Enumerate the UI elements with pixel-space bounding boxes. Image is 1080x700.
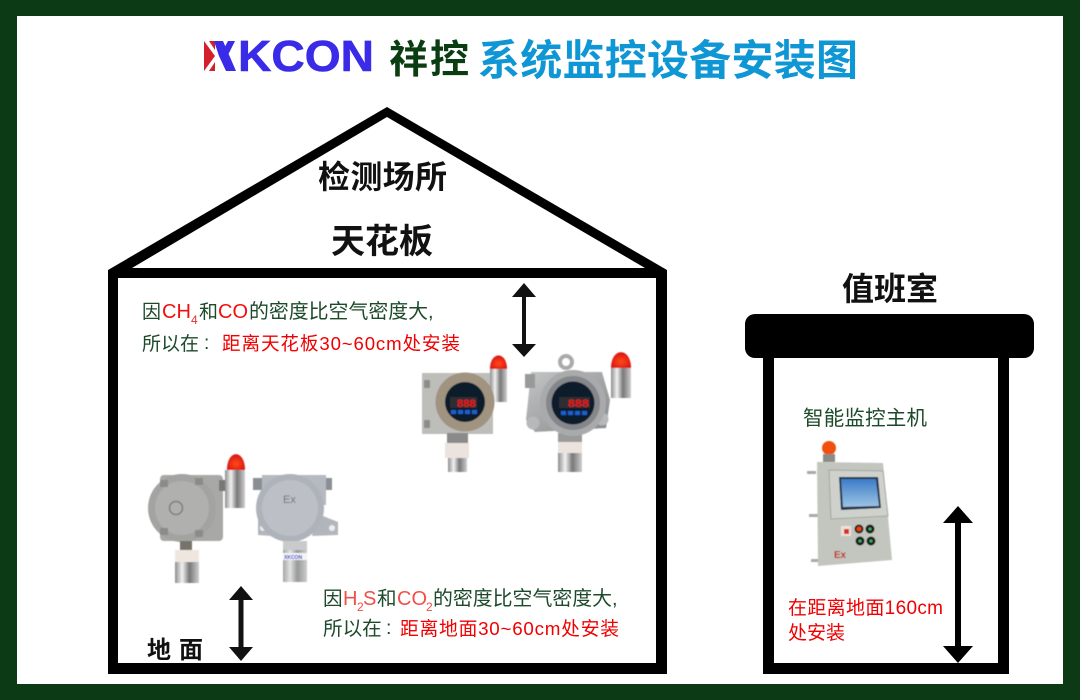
house outline: detection site — [108, 107, 667, 674]
text block: CH4 and CO note: : — [204, 333, 209, 354]
text block: H2S and CO2 note: CO — [397, 588, 427, 610]
device: lower left detector — [148, 454, 245, 583]
text block: CH4 and CO note — [142, 300, 460, 355]
heading: ceiling: 天花板 — [331, 223, 433, 261]
text block: CH4 and CO note: 所以在 — [142, 333, 199, 355]
text block: H2S and CO2 note: 的密度比空气密度大, — [433, 587, 618, 610]
text block: CH4 and CO note: 和 — [199, 301, 218, 323]
duty room roof — [745, 314, 1034, 358]
device: control panel — [807, 441, 892, 566]
text block: H2S and CO2 note: 所以在 — [323, 618, 382, 640]
text block: panel installation height — [788, 597, 943, 644]
device: lower right detector: Ex — [283, 494, 296, 506]
heading: ground: 地 面 — [147, 637, 203, 664]
device: upper left detector: 888 — [457, 398, 476, 410]
arrow: panel height — [943, 506, 973, 663]
text block: H2S and CO2 note: 距离地面30~60cm处安装 — [400, 618, 619, 639]
text block: panel installation height: 处安装 — [788, 622, 845, 644]
text block: H2S and CO2 note: 和 — [377, 588, 397, 610]
duty room outline — [763, 350, 1009, 674]
text block: H2S and CO2 note: 2 — [357, 600, 364, 614]
text block: H2S and CO2 note: : — [386, 617, 391, 639]
device: lower right detector: XKCON — [284, 555, 302, 561]
device: upper right detector: 888 — [568, 398, 589, 410]
label: monitoring host: 智能监控主机 — [803, 407, 928, 430]
title: brand name: 祥控 — [389, 39, 469, 82]
device: upper right detector — [525, 352, 631, 472]
arrow: distance to ceiling — [512, 283, 536, 357]
logo: XKCON: KCON — [238, 32, 374, 81]
arrow: distance to ground — [229, 586, 253, 661]
text block: CH4 and CO note: 距离天花板30~60cm处安装 — [222, 333, 460, 354]
text block: CH4 and CO note: CH — [162, 301, 191, 323]
title — [204, 32, 858, 84]
device: upper left detector — [422, 356, 507, 472]
text block: H2S and CO2 note — [323, 587, 619, 640]
device: lower right detector — [253, 474, 338, 582]
text block: panel installation height: 在距离地面160cm — [788, 597, 943, 619]
title: main heading: 系统监控设备安装图 — [478, 37, 858, 84]
device: control panel: Ex — [834, 550, 846, 561]
text block: H2S and CO2 note: S — [363, 588, 376, 610]
text block: H2S and CO2 note: 2 — [426, 600, 433, 614]
text block: CH4 and CO note: 4 — [191, 313, 198, 327]
heading: detection site: 检测场所 — [318, 159, 447, 195]
text block: H2S and CO2 note: 因 — [323, 588, 343, 610]
text block: CH4 and CO note: 因 — [142, 302, 161, 323]
text block: CH4 and CO note: 的密度比空气密度大, — [249, 300, 434, 323]
heading: duty room: 值班室 — [842, 271, 938, 307]
text block: CH4 and CO note: CO — [218, 301, 248, 323]
text block: H2S and CO2 note: H — [343, 588, 357, 610]
